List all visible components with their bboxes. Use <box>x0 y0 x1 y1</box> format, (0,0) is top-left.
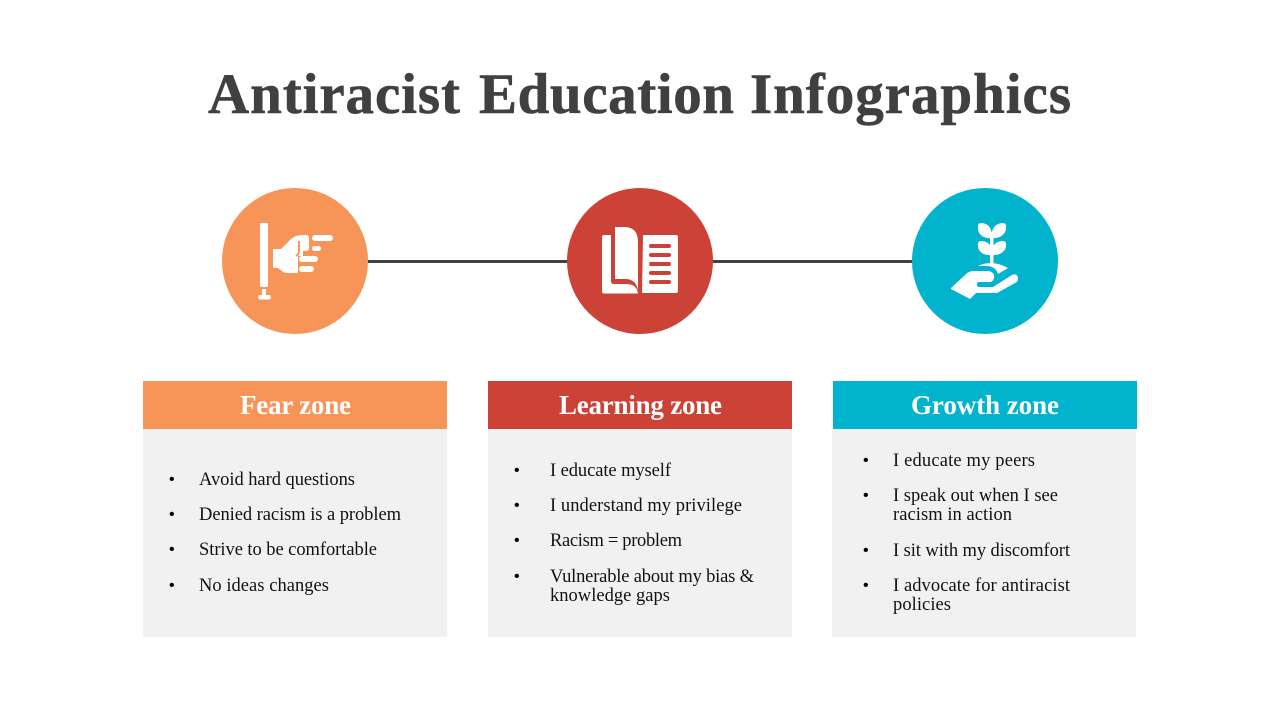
panel body: growth zone <box>832 429 1136 637</box>
bullet list: growth zone <box>863 451 1071 615</box>
bullet list: growth zone: I speak out when I see <box>893 486 1058 506</box>
panel: learning zone <box>488 381 792 637</box>
bullet list: learning zone: Racism = problem <box>550 531 683 551</box>
bullet list: fear zone: Denied racism is a problem <box>199 505 402 525</box>
bullet list: fear zone: • <box>169 506 175 523</box>
header: fear zone: Fear zone <box>240 390 351 420</box>
bullet list: fear zone: • <box>169 541 175 558</box>
bullet list: learning zone: • <box>514 532 520 549</box>
panel: fear zone <box>143 381 447 637</box>
panel: growth zone <box>832 381 1137 637</box>
icon: learning zone circle with open book <box>567 188 713 334</box>
panel body: fear zone <box>143 429 447 637</box>
bullet list: growth zone: • <box>863 542 869 559</box>
panel body: learning zone <box>488 429 792 637</box>
bullet list: fear zone: Avoid hard questions <box>199 470 355 490</box>
timeline connector line <box>365 260 915 263</box>
bullet list: growth zone: I advocate for antiracist <box>893 576 1071 596</box>
bullet list: growth zone: • <box>863 577 869 594</box>
bullet list: learning zone: • <box>514 462 520 479</box>
bullet list: learning zone: I educate myself <box>550 461 672 481</box>
bullet list: fear zone: • <box>169 577 175 594</box>
bullet list: growth zone: I educate my peers <box>893 451 1035 471</box>
bullet list: learning zone: • <box>514 568 520 585</box>
bullet list: growth zone: • <box>863 487 869 504</box>
bullet list: learning zone: • <box>514 497 520 514</box>
bullet list: growth zone: policies <box>893 595 951 615</box>
bullet list: learning zone: I understand my privilege <box>550 496 742 516</box>
title: Infographics <box>750 63 1071 126</box>
bullet list: growth zone: I sit with my discomfort <box>893 541 1071 561</box>
title: Education <box>479 63 734 126</box>
title <box>208 63 1071 126</box>
bullet list: learning zone <box>514 461 755 606</box>
bullet list: fear zone: Strive to be comfortable <box>199 540 377 560</box>
icon: growth zone circle with plant in hand <box>912 188 1058 334</box>
bullet list: learning zone: knowledge gaps <box>550 586 670 606</box>
bullet list: fear zone <box>169 470 402 596</box>
bullet list: learning zone: Vulnerable about my bias & <box>550 567 755 587</box>
header: learning zone <box>488 381 792 429</box>
header: fear zone <box>143 381 447 429</box>
bullet list: growth zone: • <box>863 452 869 469</box>
icon: fear zone circle with pointing hand <box>222 188 368 334</box>
bullet list: fear zone: No ideas changes <box>199 576 329 596</box>
bullet list: fear zone: • <box>169 471 175 488</box>
header: growth zone: Growth zone <box>911 390 1059 420</box>
bullet list: growth zone: racism in action <box>893 505 1012 525</box>
header: growth zone <box>833 381 1137 429</box>
title: Antiracist <box>208 63 460 126</box>
header: learning zone: Learning zone <box>559 390 722 420</box>
